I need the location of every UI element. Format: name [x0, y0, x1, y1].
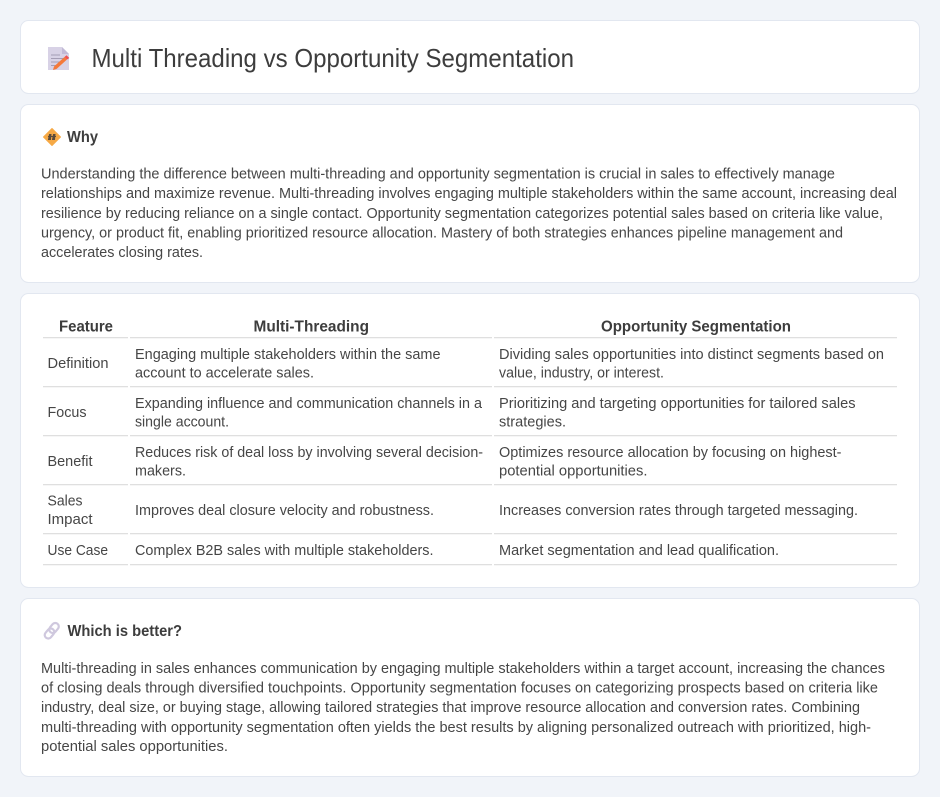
row: sales impact: Improves deal closure velocity and robustness.: [135, 503, 434, 519]
text block: which is better paragraph: potential sales opportunities.: [41, 739, 228, 755]
panel: title card: [20, 20, 920, 94]
heading: which is better: Which is better?: [68, 623, 182, 640]
row: definition: [48, 347, 884, 382]
table header: Opportunity Segmentation: [601, 318, 791, 336]
row: sales impact: Increases conversion rates through targeted messaging.: [499, 503, 858, 519]
text block: which is better paragraph: Multi-threading in sales enhances communication by engaging multiple stakeholders within a target account, increasing the chances: [41, 661, 885, 677]
text block: why paragraph: urgency, or product fit, enabling prioritized resource allocation. Mastery of both strategies enhances pipeline management and: [41, 226, 843, 242]
row: focus: single account.: [135, 414, 229, 430]
text block: which is better paragraph: industry, deal size, or buying stage, allowing tailored strategies that improve resource allocation and conversion rates. Combining: [41, 700, 860, 716]
text block: why paragraph: relationships and maximize revenue. Multi-threading involves engaging multiple stakeholders within the same account, increasing deal: [41, 186, 897, 202]
row: definition: account to accelerate sales.: [135, 366, 314, 382]
row: definition: Dividing sales opportunities into distinct segments based on: [499, 347, 884, 363]
row: sales impact: [48, 494, 858, 528]
row: focus: [48, 396, 856, 430]
row: focus: Expanding influence and communication channels in a: [135, 396, 482, 412]
panel: which is better: [20, 598, 920, 776]
panel: comparison table: [20, 294, 920, 588]
row: use case: Market segmentation and lead qualification.: [499, 543, 779, 559]
row: benefit: Optimizes resource allocation by focusing on highest-: [499, 445, 842, 461]
row: sales impact: Sales: [48, 494, 82, 510]
row: definition: Engaging multiple stakeholders within the same: [135, 347, 440, 363]
title: Multi Threading vs Opportunity Segmentation: [92, 45, 574, 73]
icon: chain link: [43, 622, 60, 640]
icon: warning diamond: [44, 128, 60, 146]
row: definition: value, industry, or interest.: [499, 366, 664, 382]
row: benefit: makers.: [135, 464, 186, 480]
text block: which is better paragraph: of closing deals through diversified touchpoints. Opportunity segmentation focuses on categorizing prospects based on criteria like: [41, 680, 878, 696]
row: benefit: [48, 445, 842, 480]
row: focus: Focus: [48, 405, 86, 421]
row: benefit: Reduces risk of deal loss by involving several decision-: [135, 445, 483, 461]
panel: why: [20, 104, 920, 282]
row: use case: Use Case: [48, 543, 108, 559]
text block: why paragraph: [41, 166, 897, 261]
text block: why paragraph: resilience by reducing reliance on a single contact. Opportunity segmentation categorizes potential sales based on criteria like value,: [41, 206, 883, 222]
row: focus: Prioritizing and targeting opportunities for tailored sales: [499, 396, 856, 412]
row: benefit: Benefit: [48, 454, 92, 470]
row: benefit: potential opportunities.: [499, 464, 648, 480]
table header: [59, 318, 791, 336]
icon: document with pencil: [48, 47, 69, 70]
text block: why paragraph: Understanding the difference between multi-threading and opportunity segmentation is crucial in sales to effectively manage: [41, 166, 835, 182]
text block: which is better paragraph: multi-threading with opportunity segmentation often yields the best results by aligning personalized outreach with prioritized, high-: [41, 720, 871, 736]
row: sales impact: Impact: [48, 512, 93, 528]
heading: why: Why: [67, 129, 98, 146]
text block: why paragraph: accelerates closing rates.: [41, 245, 203, 261]
table header: Multi-Threading: [254, 318, 369, 336]
row: use case: [48, 543, 779, 559]
text block: which is better paragraph: [41, 661, 885, 755]
table header: Feature: [59, 318, 113, 336]
row: focus: strategies.: [499, 414, 566, 430]
row: use case: Complex B2B sales with multiple stakeholders.: [135, 543, 434, 559]
row: definition: Definition: [48, 356, 108, 372]
